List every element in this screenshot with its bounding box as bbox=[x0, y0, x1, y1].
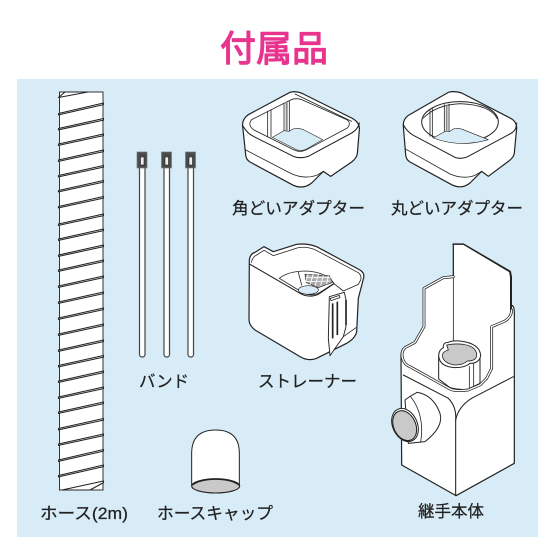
label: square adapter: 角どいアダプター bbox=[232, 199, 365, 218]
joint pipe bbox=[439, 341, 481, 389]
hose cap bbox=[192, 430, 240, 493]
label: round adapter: 丸どいアダプター bbox=[391, 199, 523, 218]
label: strainer: ストレーナー bbox=[258, 373, 357, 391]
square downspout adapter bbox=[243, 92, 359, 187]
panel: accessories background bbox=[17, 79, 538, 537]
joint body bbox=[386, 244, 514, 496]
label: hose: ホース(2m) bbox=[40, 505, 128, 523]
strainer bbox=[249, 244, 364, 360]
label: joint body: 継手本体 bbox=[418, 502, 484, 521]
round downspout adapter bbox=[403, 92, 517, 187]
joint side spout bbox=[386, 392, 441, 446]
band 2 bbox=[162, 152, 172, 357]
band 1 bbox=[137, 152, 147, 357]
title: 付属品 bbox=[220, 28, 328, 69]
label: band: バンド bbox=[139, 373, 189, 391]
hose bbox=[58, 92, 104, 490]
strainer mesh bbox=[279, 271, 334, 295]
band 3 bbox=[186, 152, 196, 357]
label: hose cap: ホースキャップ bbox=[157, 504, 273, 523]
strainer clip bbox=[328, 292, 356, 356]
bands bbox=[137, 152, 196, 357]
